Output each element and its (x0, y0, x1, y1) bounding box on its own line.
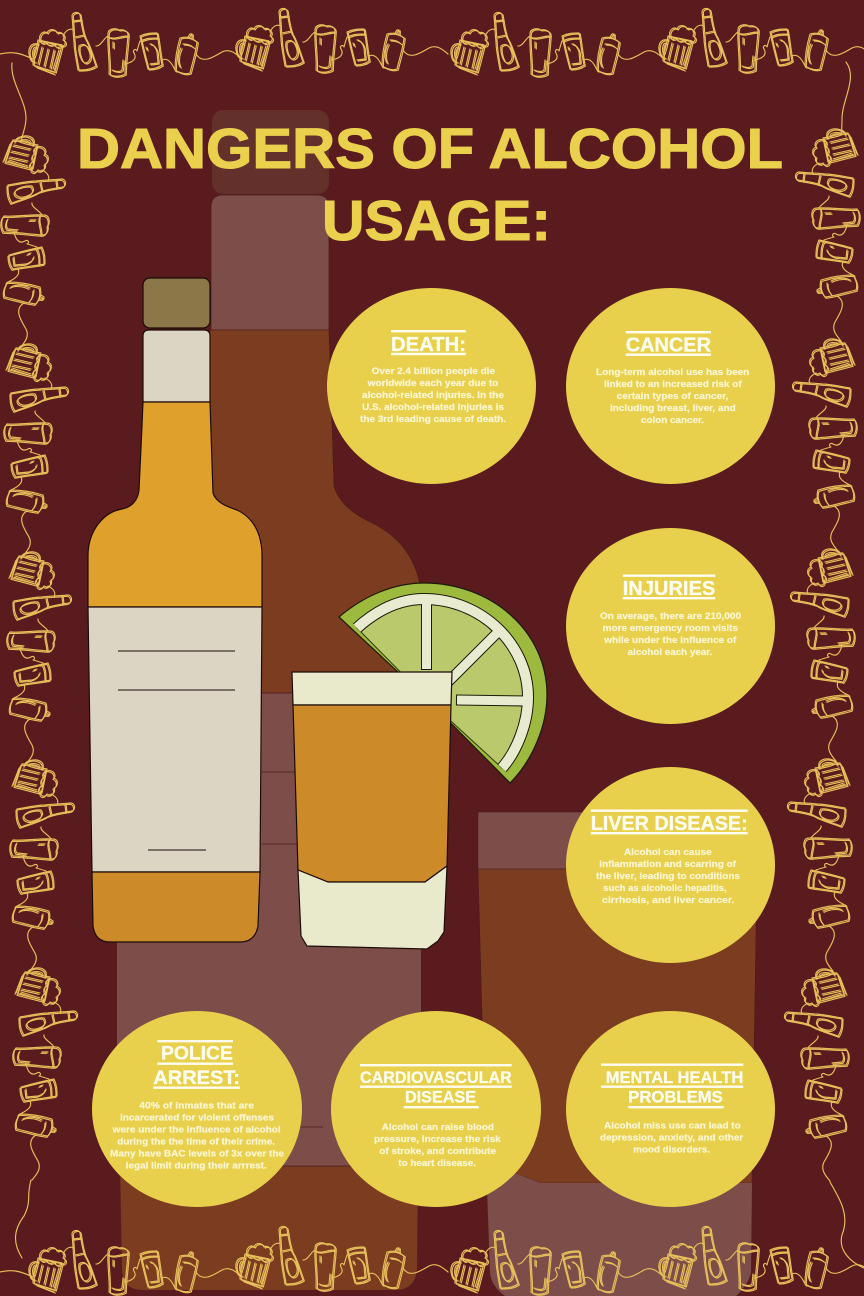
text: liver disease: the liver, leading to conditions (596, 871, 740, 882)
text: liver disease: inflammation and scarring of (599, 859, 737, 870)
panel: mental health problems (566, 1011, 775, 1207)
decorative border: top row of drinks (0, 8, 864, 77)
text: police arrest: during the the time of their crime. (117, 1137, 275, 1148)
text: police arrest: Many have BAC levels of 3x over the (110, 1149, 284, 1160)
heading: injuries: INJURIES (623, 578, 715, 600)
text: injuries (600, 611, 741, 658)
text: police arrest: incarcerated for violent offenses (120, 1113, 274, 1124)
heading: cancer: CANCER (626, 334, 712, 356)
heading: mental health problems (601, 1064, 743, 1108)
heading: cardiovascular disease: CARDIOVASCULAR (360, 1068, 512, 1087)
text: police arrest: legal limit during their arrrest. (126, 1161, 267, 1172)
heading: police arrest: ARREST: (153, 1067, 240, 1089)
text: injuries: while under the influence of (603, 635, 737, 646)
illustration: shot glass (292, 672, 452, 949)
text: cancer: linked to an increased risk of (604, 379, 743, 390)
text: death: Over 2.4 billion people die (372, 366, 495, 377)
heading: liver disease: LIVER DISEASE: (591, 813, 748, 835)
text: mental health problems: mood disorders. (633, 1145, 710, 1156)
text: police arrest (110, 1101, 284, 1172)
text: liver disease: cirrhosis, and liver cancer. (602, 895, 734, 906)
text: cancer: including breast, liver, and (610, 403, 736, 414)
text: death: alcohol-related injuries. In the (362, 390, 504, 401)
heading: cardiovascular disease (360, 1064, 512, 1108)
text: mental health problems: Alcohol miss use can lead to (604, 1121, 741, 1132)
illustration: lime wedge (339, 583, 547, 783)
text: cancer (596, 367, 749, 426)
text: death: worldwide each year due to (367, 378, 498, 389)
heading: cardiovascular disease: DISEASE (405, 1088, 476, 1106)
text: death: U.S. alcohol-related injuries is (362, 402, 504, 413)
text: cardiovascular disease: Alcohol can raise blood (382, 1122, 494, 1133)
title: DANGERS OF ALCOHOL (77, 117, 783, 181)
panel: cardiovascular disease (331, 1011, 541, 1207)
text: cancer: colon cancer. (641, 415, 704, 426)
text: mental health problems: depression, anxiety, and other (600, 1133, 744, 1144)
illustration: background glass (478, 812, 757, 1296)
title: USAGE: (322, 189, 551, 253)
heading: death: DEATH: (391, 334, 466, 356)
text: cancer: Long-term alcohol use has been (596, 367, 749, 378)
text: police arrest: were under the influence of alcohol (112, 1125, 281, 1136)
text: cardiovascular disease: pressure, increase the risk (374, 1134, 501, 1145)
text: injuries: more emergency room visits (603, 623, 738, 634)
text: liver disease: such as alcoholic hepatitis, (603, 883, 727, 894)
text: injuries: On average, there are 210,000 (600, 611, 741, 622)
panel: cancer (566, 288, 775, 484)
decorative border: right column of drinks (784, 62, 864, 1268)
panel: liver disease (566, 767, 775, 963)
heading: mental health problems: MENTAL HEALTH (606, 1068, 743, 1087)
panel: death (327, 288, 536, 484)
title (77, 117, 783, 253)
decorative border: left column of drinks (1, 63, 78, 1258)
text: cardiovascular disease (374, 1122, 501, 1169)
illustration: front whisky bottle (88, 278, 262, 942)
text: mental health problems (600, 1121, 744, 1156)
heading: police arrest: POLICE (161, 1042, 233, 1064)
panel: police arrest (92, 1011, 302, 1207)
text: death: the 3rd leading cause of death. (360, 414, 506, 425)
text: cancer: certain types of cancer, (617, 391, 729, 402)
heading: police arrest (153, 1040, 240, 1089)
illustration: background bottle (117, 110, 421, 1290)
text: cardiovascular disease: of stroke, and contribute (379, 1146, 496, 1157)
text: death (360, 366, 506, 425)
text: liver disease: Alcohol can cause (624, 847, 712, 858)
text: police arrest: 40% of inmates that are (139, 1101, 254, 1112)
text: cardiovascular disease: to heart disease. (398, 1158, 476, 1169)
panel: injuries (566, 528, 775, 724)
text: liver disease (596, 847, 740, 906)
text: injuries: alcohol each year. (628, 647, 712, 658)
decorative border: bottom row of drinks (0, 1226, 864, 1295)
heading: mental health problems: PROBLEMS (628, 1088, 723, 1107)
